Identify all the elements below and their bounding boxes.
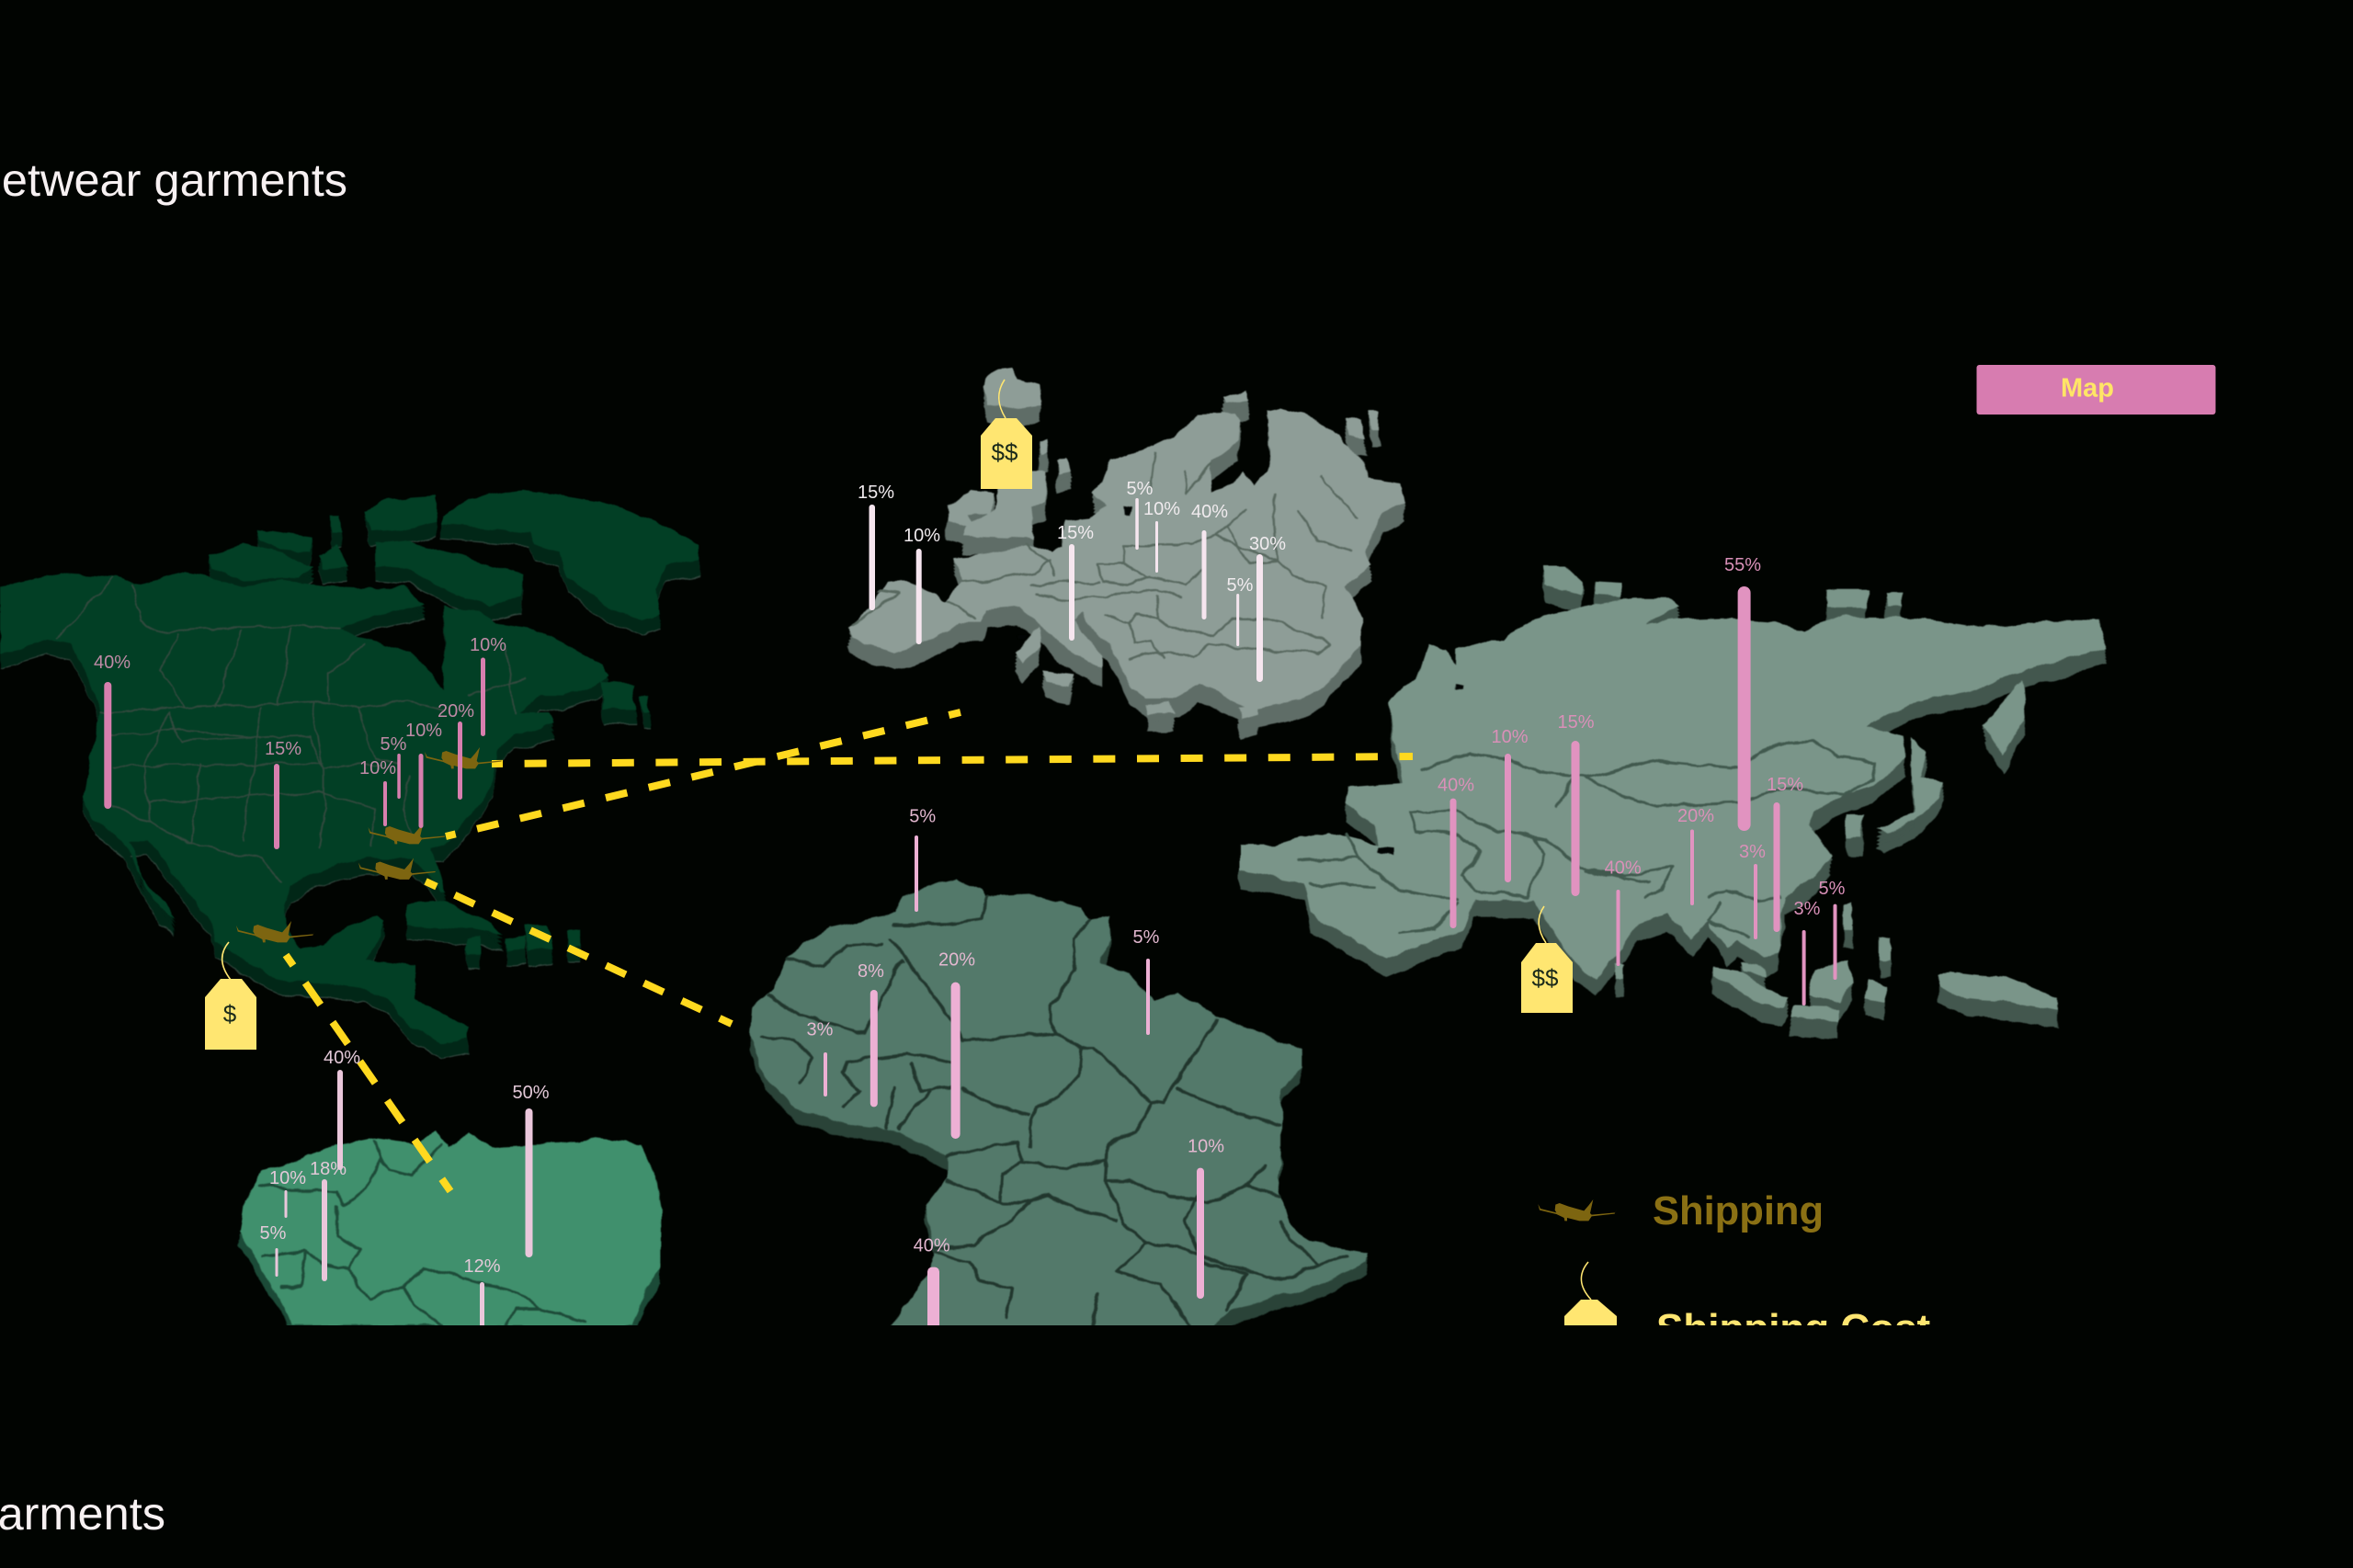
- bars: Africa: [807, 807, 1224, 1341]
- legend: shipping cost label: Shipping Cost: [1656, 1306, 1931, 1351]
- bar: 3%: 3%: [1739, 842, 1766, 862]
- bar: 40%: [324, 1048, 360, 1170]
- bar: 15% east: 15%: [1767, 775, 1803, 795]
- bar: 10%: 10%: [1491, 727, 1529, 747]
- bar: 20%: 20%: [438, 701, 474, 722]
- bar: 12%: [463, 1256, 501, 1337]
- bar: 10%: [269, 1168, 306, 1218]
- bar: 40% south: [1605, 858, 1642, 966]
- shipping route: to Europe: [446, 712, 961, 836]
- legend: tag icon: [1564, 1262, 1617, 1342]
- bar: 15%: 15%: [265, 739, 301, 759]
- bar: 20%: [438, 701, 474, 800]
- price tag: North America: $: [223, 1000, 237, 1028]
- map button: [1976, 365, 2215, 415]
- map: Asia: [1240, 565, 2108, 1040]
- bar: 40%: [94, 653, 131, 809]
- bar: 15% Italy: 15%: [1057, 523, 1094, 543]
- shipping route: to Asia: [492, 756, 1413, 764]
- bar: 8%: [858, 961, 884, 1107]
- bar: 10% east: [470, 635, 506, 736]
- bar: 55%: 55%: [1724, 555, 1761, 575]
- continents: [0, 368, 2108, 1353]
- title: bottom: arments: [0, 1487, 165, 1540]
- bar: 20%: [938, 950, 975, 1139]
- bars: Asia: [1438, 555, 1846, 1006]
- bar: 40% west: [1438, 776, 1474, 928]
- bar: 10% west: [359, 758, 396, 826]
- bar: 3% Indonesia: [1794, 899, 1821, 1006]
- map: South America: [239, 1132, 661, 1341]
- price tag: Europe: [981, 380, 1032, 489]
- bar: 8%: 8%: [858, 961, 884, 982]
- bar: 20%: 20%: [938, 950, 975, 971]
- bar: 5%: 5%: [1127, 479, 1154, 499]
- map button: Map: [2061, 373, 2114, 403]
- shipping route: to South America: [286, 955, 450, 1191]
- title: top: etwear garments: [2, 153, 347, 206]
- bar: 50%: [512, 1083, 550, 1257]
- bar: 10% middle: [405, 721, 442, 828]
- price tag: North America: [205, 942, 256, 1050]
- bar: 40% west: 40%: [1438, 776, 1474, 796]
- bar: 15%: [265, 739, 301, 849]
- bar: 40%: 40%: [324, 1048, 360, 1068]
- bars: South America: [260, 1048, 550, 1337]
- bar: 50%: 50%: [512, 1083, 550, 1103]
- legend: plane icon: [1538, 1199, 1617, 1221]
- bar: 18%: 18%: [310, 1159, 347, 1179]
- bar: 3% Indonesia: 3%: [1794, 899, 1821, 919]
- bar: 30%: 30%: [1249, 534, 1286, 554]
- bar: 10%: [1143, 499, 1180, 573]
- bar: 40%: 40%: [94, 653, 131, 673]
- shipping route: to Africa: [426, 881, 732, 1024]
- bar: 18%: [310, 1159, 347, 1281]
- price tag: Asia: $$: [1532, 964, 1559, 992]
- bar: 5%: [260, 1223, 287, 1277]
- bar: 12%: 12%: [463, 1256, 501, 1277]
- legend: [1538, 1189, 1931, 1351]
- bar: 20%: 20%: [1677, 806, 1714, 826]
- bars: North America: [94, 635, 506, 849]
- bar: 30%: [1249, 534, 1286, 682]
- bar: 40%: [1191, 502, 1228, 619]
- bar: 5% east: 5%: [1227, 575, 1254, 596]
- bar: 40%: 40%: [914, 1235, 950, 1256]
- bar: 5%: [1127, 479, 1154, 550]
- price tag: Europe: $$: [992, 438, 1018, 466]
- bar: 5%: [381, 734, 407, 799]
- bar: 10%: 10%: [1188, 1136, 1224, 1156]
- bar: 5% north: [909, 807, 936, 912]
- bar: 15% Portugal: [858, 483, 894, 610]
- bar: 5%: 5%: [260, 1223, 287, 1244]
- bar: 40%: [914, 1235, 950, 1341]
- bar: 3%: 3%: [807, 1020, 834, 1040]
- bar: 5% east: [1133, 927, 1160, 1035]
- bar: 10% Spain: [904, 526, 940, 644]
- legend: shipping label: Shipping: [1653, 1189, 1824, 1233]
- bar: 15%: 15%: [1557, 712, 1595, 733]
- bar: 20%: [1677, 806, 1714, 905]
- bar: 40%: 40%: [1191, 502, 1228, 522]
- bar: 10% middle: 10%: [405, 721, 442, 741]
- bar: 10% east: 10%: [470, 635, 506, 655]
- price tag: Asia: [1521, 906, 1573, 1013]
- map: North America: [0, 491, 699, 1060]
- map: Africa: [749, 879, 1368, 1353]
- bar: 10%: 10%: [1143, 499, 1180, 519]
- bar: 5% east: [1227, 575, 1254, 646]
- bar: 5% east: 5%: [1133, 927, 1160, 948]
- plane icon: northeast: [425, 747, 504, 768]
- bar: 10%: [1491, 727, 1529, 882]
- plane icon: gulf: [358, 858, 438, 880]
- plane icon: southeast: [368, 826, 447, 844]
- bar: 3%: [807, 1020, 834, 1096]
- bar: 10%: [1188, 1136, 1224, 1299]
- bar: 10%: 10%: [269, 1168, 306, 1188]
- bar: 3%: [1739, 842, 1766, 939]
- bar: 55%: [1724, 555, 1761, 831]
- bar: 15% Portugal: 15%: [858, 483, 894, 503]
- plane icon: Mexico: [236, 921, 315, 942]
- bar: 15% east: [1767, 775, 1803, 932]
- bar: 40% south: 40%: [1605, 858, 1642, 879]
- bar: 5%: [1819, 879, 1846, 980]
- bar: 15%: [1557, 712, 1595, 896]
- bar: 5%: 5%: [381, 734, 407, 755]
- bar: 10% Spain: 10%: [904, 526, 940, 546]
- bar: 10% west: 10%: [359, 758, 396, 778]
- bar: 5%: 5%: [1819, 879, 1846, 899]
- bar: 15% Italy: [1057, 523, 1094, 641]
- bar: 5% north: 5%: [909, 807, 936, 827]
- bars: Europe: [858, 479, 1286, 682]
- map: Europe: [847, 368, 1405, 740]
